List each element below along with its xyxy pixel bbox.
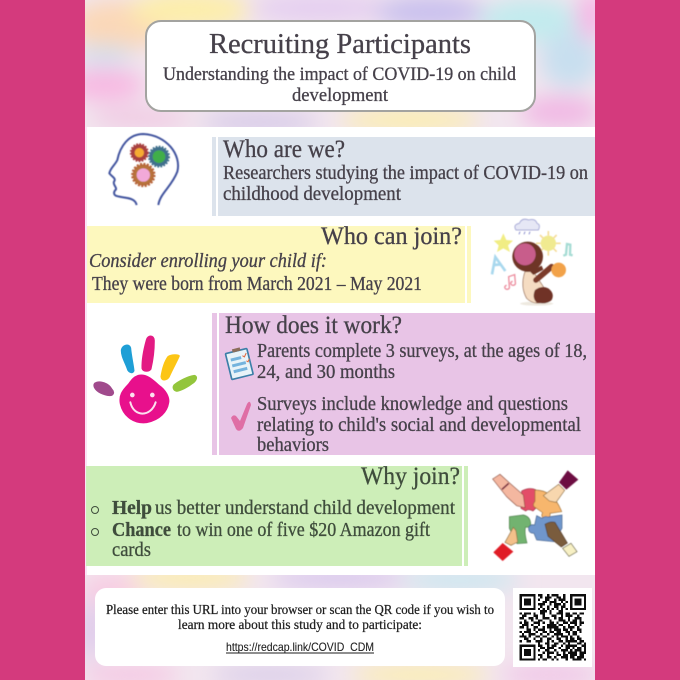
list: reasons: cards	[112, 540, 151, 561]
left paper edge	[85, 127, 87, 575]
text: eligibility: They were born from March 2021 – May 2021	[92, 274, 422, 295]
icon: hands with puzzle pieces	[493, 470, 578, 561]
icon: baby with symbols	[492, 219, 573, 306]
text: survey content: behaviors	[257, 435, 329, 456]
text: who are we: childhood development	[223, 184, 402, 205]
text: instructions: Please enter this URL into your browser or scan the QR code if you wish to	[106, 603, 494, 618]
text: eligibility: Consider enrolling your child if:	[89, 251, 327, 272]
subtitle	[163, 64, 516, 106]
list: reasons: us better understand child development	[155, 498, 456, 519]
heading: who are we: Who are we?	[223, 136, 345, 163]
title: Recruiting Participants	[209, 29, 471, 60]
panel: who can join	[87, 223, 471, 303]
panel: how does it work	[212, 312, 595, 456]
list: reasons: Help	[112, 498, 152, 519]
icon: smiling hand	[94, 336, 196, 422]
QR code	[513, 588, 592, 667]
heading: why join: Why join?	[361, 463, 460, 490]
panel: who are we	[212, 136, 595, 216]
subtitle: development	[292, 85, 389, 106]
icon: clipboard	[225, 346, 253, 380]
icon: check mark	[231, 402, 251, 431]
subtitle: Understanding the impact of COVID-19 on child	[163, 64, 516, 85]
text: survey content	[257, 394, 582, 456]
text: surveys schedule: 24, and 30 months	[257, 362, 395, 383]
text: who are we: Researchers studying the impact of COVID-19 on	[223, 163, 588, 184]
watercolor footer background	[80, 567, 600, 680]
text: survey content: relating to child's social and developmental	[257, 415, 582, 436]
poster paper	[85, 0, 595, 680]
text: surveys schedule	[257, 341, 587, 383]
callout: study link	[95, 588, 505, 666]
list: reasons: to win one of five $20 Amazon gift	[177, 520, 431, 541]
watercolor header background	[65, 0, 608, 132]
text: survey content: Surveys include knowledge and questions	[257, 394, 568, 415]
text: eligibility	[89, 251, 422, 295]
heading: who can join: Who can join?	[321, 223, 462, 250]
text: who are we	[223, 163, 588, 205]
heading: how does it work: How does it work?	[225, 312, 402, 339]
list: reasons: Chance	[112, 520, 171, 541]
panel: why join	[86, 463, 468, 566]
text: surveys schedule: Parents complete 3 surveys, at the ages of 18,	[257, 341, 587, 362]
list: reasons	[92, 498, 456, 561]
text: instructions	[106, 603, 494, 633]
text: URL: https://redcap.link/COVID_CDM	[226, 640, 374, 654]
icon: head with gears	[109, 134, 178, 205]
text: instructions: learn more about this study and to participate:	[178, 618, 422, 633]
title box	[146, 21, 535, 111]
